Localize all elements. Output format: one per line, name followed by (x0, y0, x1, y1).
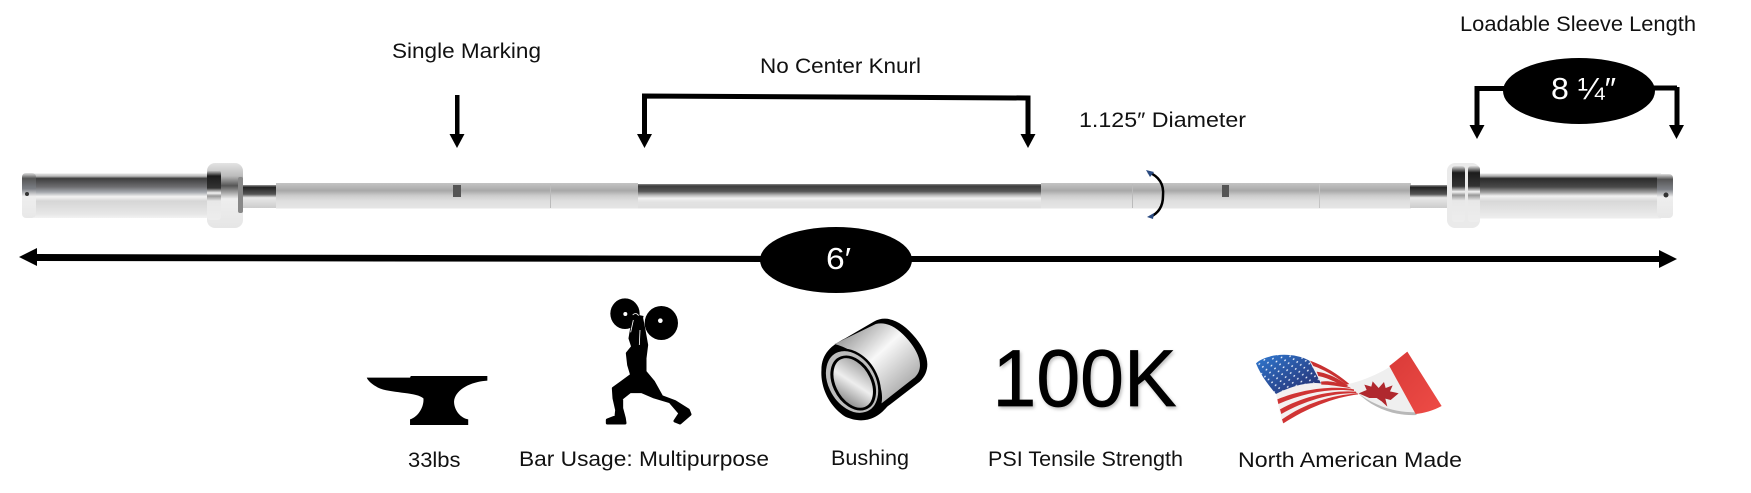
label: diameter: 1.125″ Diameter (1079, 108, 1246, 132)
label: weight: 33lbs (408, 448, 460, 472)
shaft (243, 183, 1448, 208)
barbell photo (22, 163, 1673, 228)
icon: bushing (814, 319, 927, 421)
arrow: single marking (450, 95, 464, 148)
dimension arrow: overall length (19, 248, 1677, 268)
icon: diameter rotation arc (1146, 170, 1163, 219)
label: no center knurl: No Center Knurl (760, 54, 921, 78)
stat: 100K: 100K (992, 334, 1176, 424)
icon: waving US and Canadian flags (1256, 352, 1442, 423)
label: north american made: North American Made (1238, 448, 1462, 472)
label: single marking: Single Marking (392, 39, 541, 63)
badge: 6 feet (760, 227, 912, 293)
badge: 6 feet: 6′ (826, 241, 851, 276)
bracket arrow: sleeve length (1470, 87, 1684, 139)
label: bar usage: Bar Usage: Multipurpose (519, 447, 769, 471)
left collar (207, 163, 243, 228)
label: bushing: Bushing (831, 446, 909, 470)
badge: 8 1/4 inches (1503, 58, 1655, 124)
right sleeve (1480, 174, 1673, 218)
bracket arrow: no center knurl (637, 96, 1036, 148)
icon: anvil (367, 376, 487, 425)
label: loadable sleeve length: Loadable Sleeve Length (1460, 12, 1696, 36)
icon: weightlifter (607, 298, 690, 423)
right collar (1447, 163, 1480, 228)
label: tensile strength: PSI Tensile Strength (988, 447, 1183, 471)
left sleeve (22, 173, 208, 218)
badge: 8 1/4 inches: 8 ¼″ (1551, 71, 1616, 106)
